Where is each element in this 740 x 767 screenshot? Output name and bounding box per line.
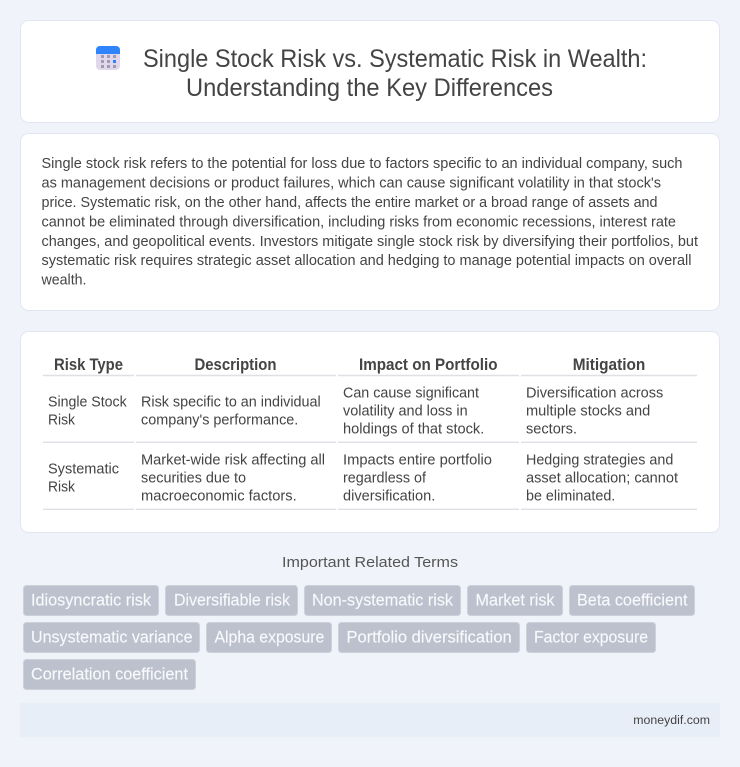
related term tags: Factor exposure: [534, 628, 648, 647]
table row: systematic risk: Hedging strategies and: [526, 452, 673, 468]
panel: summary text: price. Systematic risk, on the other hand, affects the entire market or a broad range of assets and: [42, 195, 658, 211]
table row: single stock risk: [48, 385, 663, 437]
panel: summary text: wealth.: [41, 273, 86, 289]
panel: summary text: cannot be eliminated through diversification, including risks from economic recessions, interest rate: [42, 214, 676, 230]
table header: [43, 356, 697, 509]
table row: single stock risk: company's performance.: [141, 413, 298, 429]
table row: systematic risk: Risk: [48, 480, 76, 496]
table row: single stock risk: Can cause significant: [343, 385, 479, 401]
table row: systematic risk: be eliminated.: [526, 488, 615, 504]
table header: Description: [194, 356, 276, 374]
related term tags: Diversifiable risk: [174, 591, 291, 610]
table row: systematic risk: securities due to: [141, 470, 246, 486]
panel: summary text: [20, 134, 720, 310]
icon: calendar: [96, 46, 120, 70]
table row: systematic risk: [48, 452, 678, 504]
related term tags: Market risk: [476, 591, 555, 610]
related term tags: Unsystematic variance: [31, 628, 192, 647]
table row: single stock risk: Risk specific to an individual: [141, 395, 321, 411]
related term tags: Correlation coefficient: [31, 665, 188, 684]
panel: summary text: changes, and geopolitical events. Investors mitigate single stock risk by diversifying their portfolios, but: [42, 234, 698, 250]
title: [143, 45, 647, 102]
title: Understanding the Key Differences: [186, 74, 553, 102]
table row: single stock risk: sectors.: [526, 421, 577, 437]
related term tags: Non-systematic risk: [312, 591, 454, 610]
table row: single stock risk: Diversification across: [526, 385, 663, 401]
table row: single stock risk: Single Stock: [48, 395, 127, 411]
table row: systematic risk: regardless of: [343, 470, 427, 486]
related term tags: Alpha exposure: [214, 628, 324, 647]
table header: Risk Type: [54, 356, 123, 374]
table header: Impact on Portfolio: [359, 356, 498, 374]
table row: single stock risk: volatility and loss in: [343, 403, 468, 419]
footer bar: [20, 703, 720, 737]
table row: systematic risk: macroeconomic factors.: [141, 488, 297, 504]
table row: systematic risk: Market-wide risk affecting all: [141, 452, 325, 468]
table row: systematic risk: Systematic: [48, 462, 120, 478]
table row: systematic risk: diversification.: [343, 488, 435, 504]
related term tags: Beta coefficient: [577, 591, 688, 610]
panel: summary text: Single stock risk refers to the potential for loss due to factors specific to an individual company, such: [42, 156, 682, 172]
table header: Mitigation: [573, 356, 645, 374]
panel: comparison table: [20, 332, 720, 532]
panel: title card: [20, 20, 720, 122]
table row: systematic risk: Impacts entire portfolio: [343, 452, 492, 468]
related term tags: Portfolio diversification: [346, 628, 512, 647]
related term tags: Idiosyncratic risk: [31, 591, 152, 610]
footer bar: moneydif.com: [633, 713, 710, 727]
title: Single Stock Risk vs. Systematic Risk in Wealth:: [143, 45, 647, 73]
table row: single stock risk: multiple stocks and: [526, 403, 650, 419]
panel: summary text: systematic risk requires strategic asset allocation and hedging to manage potential impacts on overall: [42, 253, 692, 269]
table row: single stock risk: Risk: [48, 413, 76, 429]
related term tags: [24, 586, 694, 690]
table row: systematic risk: asset allocation; cannot: [526, 470, 678, 486]
table row: single stock risk: holdings of that stock.: [343, 421, 484, 437]
panel: summary text: as management decisions or product failures, which can cause significant volatility in that stock's: [42, 175, 661, 191]
heading: related terms: Important Related Terms: [282, 554, 458, 571]
